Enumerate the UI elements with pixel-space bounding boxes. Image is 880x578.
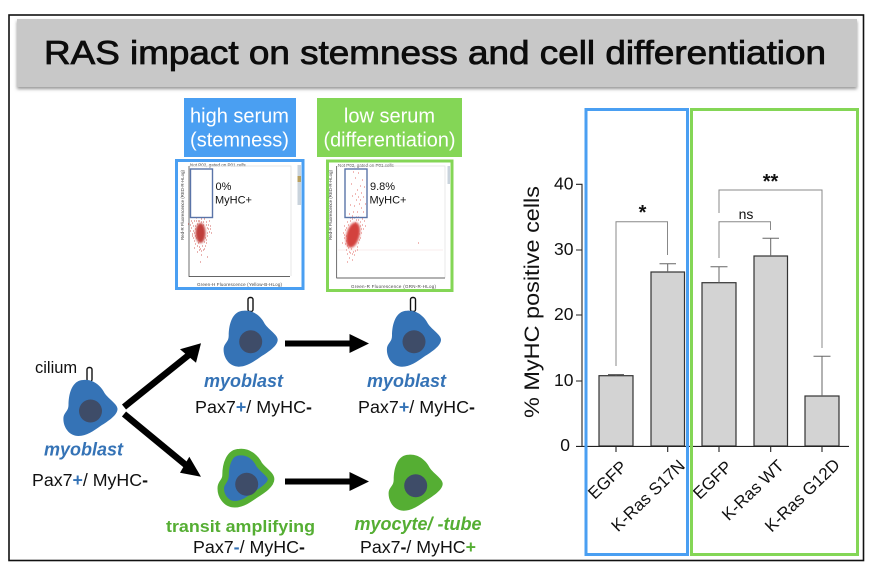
bracket: G12D significance: **: [763, 171, 778, 193]
scatter cluster: [342, 172, 419, 262]
panel: low serum label: low serum: [344, 106, 435, 128]
gate percentage: 0%: [216, 181, 232, 193]
panel: low serum flow cytometry plot: Red-R Fluorescence (RED-R-HLog): [328, 170, 333, 240]
cell: myocyte / myotube: myocyte/ -tube: [354, 514, 482, 534]
gate percentage: [215, 181, 252, 206]
cell: starting myoblast: Pax7+/ MyHC-: [32, 470, 148, 490]
arrow: transit amplifying to myocyte: [285, 472, 369, 491]
arrow: to high-serum myoblast: [124, 343, 201, 407]
y axis title: % MyHC positive cells: [521, 186, 544, 418]
highlight box: high serum bars: [586, 110, 688, 554]
x axis labels: K-Ras S17N: [608, 456, 689, 536]
cell: starting myoblast: [32, 359, 148, 490]
x axis labels: EGFP: [689, 457, 736, 503]
label: cilium: cilium: [35, 359, 77, 377]
cell: myoblast end state: [358, 298, 475, 417]
bar: EGFP low serum: [702, 267, 736, 446]
panel: high serum flow cytometry plot: Red-R Fluorescence (RED-R-HLog): [180, 170, 185, 240]
y axis: 0: [560, 435, 570, 455]
bracket: ns: ns: [739, 206, 753, 222]
x axis: [576, 446, 849, 452]
highlight box: low serum bars: [692, 110, 858, 554]
cell: transit amplifying: Pax7-/ MyHC-: [193, 537, 305, 557]
y axis: 30: [554, 239, 574, 259]
cell: myoblast high serum: myoblast: [204, 371, 284, 391]
title: RAS impact on stemness and cell differentiation: [44, 34, 826, 71]
gate percentage: 9.8%: [370, 181, 395, 193]
cell: transit amplifying: transit amplifying: [166, 517, 315, 536]
panel: low serum flow cytometry plot: Green-R Fluorescence (GRN-R-HLog): [351, 284, 436, 289]
x axis labels: [584, 455, 844, 536]
cell: myoblast end state: myoblast: [367, 371, 447, 391]
bracket: S17N significance: [616, 202, 668, 366]
panel: high serum label: (stemness): [190, 130, 289, 152]
y axis: 20: [554, 304, 574, 324]
cell: myocyte / myotube: Pax7-/ MyHC+: [360, 537, 476, 557]
y axis: 10: [554, 370, 574, 390]
panel: low serum flow cytometry plot: [328, 161, 452, 290]
gate box: [190, 169, 212, 218]
panel: high serum flow cytometry plot: Not P02, gated on P01.cells: [190, 162, 247, 168]
scatter cluster: [188, 218, 212, 262]
cell: myoblast high serum: Pax7+/ MyHC-: [195, 397, 312, 417]
cell: myoblast high serum: [195, 298, 312, 417]
panel: low serum label: [317, 98, 462, 157]
panel: low serum flow cytometry plot: Not P02, gated on P01.cells: [338, 163, 395, 168]
y axis: 40: [554, 174, 574, 194]
gate box: [345, 169, 367, 218]
panel: high serum flow cytometry plot: [176, 160, 303, 288]
y axis: [554, 174, 582, 455]
panel: high serum label: high serum: [190, 106, 289, 128]
bracket: G12D significance: [719, 171, 822, 348]
arrow: to transit amplifying: [124, 414, 201, 477]
bracket: ns: [719, 206, 770, 258]
panel: high serum label: [184, 98, 296, 157]
panel: high serum flow cytometry plot: Green-H Fluorescence (Yellow-B-HLog): [197, 282, 282, 287]
panel: low serum label: (differentiation): [324, 130, 456, 152]
x axis labels: EGFP: [584, 457, 631, 503]
bar: EGFP high serum: [599, 374, 633, 446]
bar: K-Ras WT: [754, 238, 788, 446]
cell: transit amplifying: [166, 452, 315, 557]
title banner: [17, 19, 857, 87]
gate percentage: MyHC+: [370, 194, 406, 206]
arrow: myoblast to myoblast: [285, 334, 369, 353]
x axis labels: K-Ras G12D: [761, 455, 844, 536]
cell: myoblast end state: Pax7+/ MyHC-: [358, 397, 475, 417]
x axis labels: K-Ras WT: [718, 456, 788, 524]
bar: K-Ras S17N: [651, 264, 684, 446]
cell: myocyte / myotube: [354, 455, 482, 557]
bracket: S17N significance: *: [639, 202, 647, 224]
gate percentage: [370, 181, 406, 206]
bar chart: MyHC positive cells: [521, 171, 849, 536]
gate percentage: MyHC+: [215, 194, 252, 206]
cell: starting myoblast: myoblast: [44, 440, 124, 460]
bar: K-Ras G12D: [805, 356, 839, 446]
